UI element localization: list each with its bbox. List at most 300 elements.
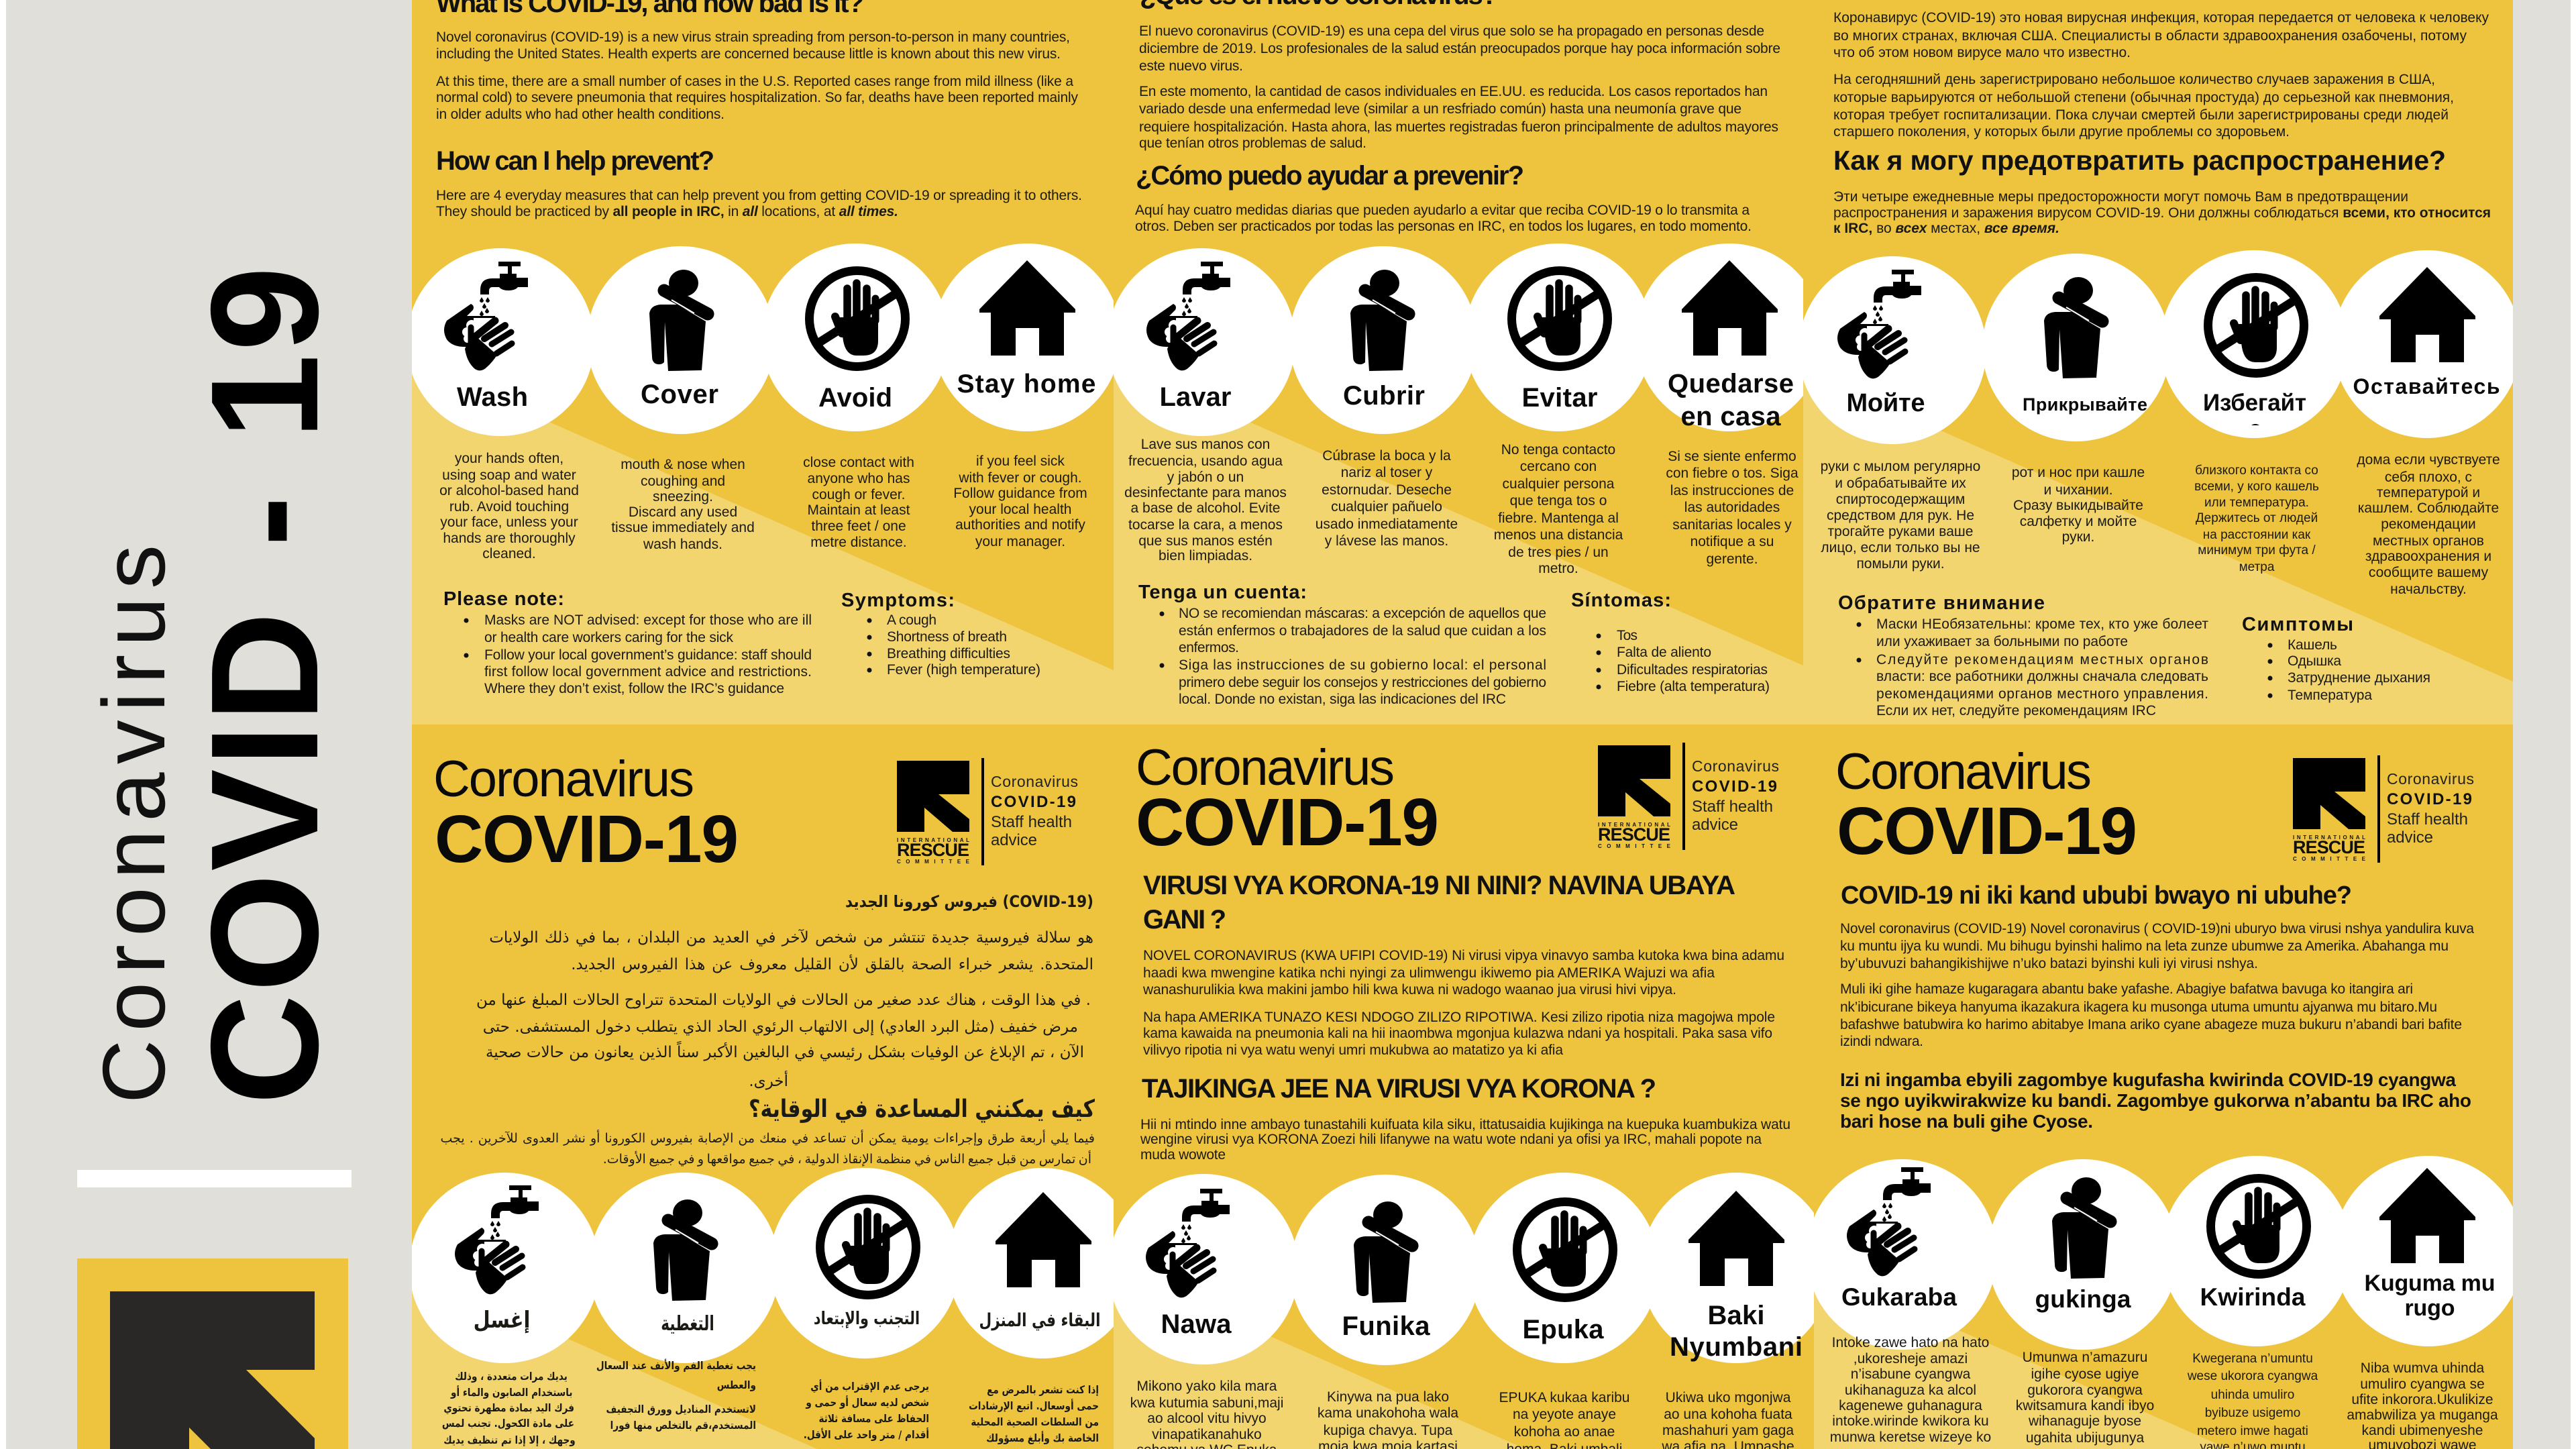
sidebar title: COVID - 19: 19 [180,266,350,439]
text: avoid description: или температура. [2204,496,2309,510]
text: cover description: и чихании. [2043,482,2113,498]
text: wash description: hands are thoroughly [443,531,576,546]
text: evitar description: de tres pies / un [1508,545,1609,560]
text: stay home description: здравоохранения и [2365,549,2491,564]
text block: arabic measures: فيما يلي أربعة طرق وإجراءات يومية يمكن أن تساعد في منعك من الإصابة بفيروس الكورونا أو نشر العدوى للآخرين . يجب [440,1130,1095,1146]
step: quedarse en casa: Quedarse [1668,369,1794,398]
text: nawa description: vinapatikanahuko [1152,1427,1262,1442]
text: cover description [2012,465,2145,545]
text block: arabic intro: أخرى. [749,1071,788,1090]
sidebar title: COVID - 19: - [180,496,350,547]
text: kuguma description: amabwiliza ya muganga [2347,1407,2498,1423]
text block: intro: старшего поколения, у которых были другие проблемы со здоровьем. [1833,124,2290,140]
text: avoid description: metre distance. [810,535,907,550]
heading: como puedo: ¿Cómo puedo ayudar a prevenir? [1136,161,1524,191]
text: avoid description: минимум три фута / [2198,543,2316,557]
list: notes: first follow local government advice and restrictions. [484,664,812,680]
list: notes: Следуйте рекомендациям местных органов [1876,652,2208,667]
text: wash description: على مادة الكحول. تجنب لمس [442,1417,574,1430]
text: quedarse description: gerente. [1706,551,1758,567]
list: symptoms: Breathing difficulties [887,646,1010,661]
list: symptoms: Shortness of breath [887,629,1007,645]
text block: measures: Эти четыре ежедневные меры предосторожности могут помочь Вам в предотвращении [1833,189,2408,205]
text block: intro: vilivyo ripotia ni vya watu wenyi umri mukubwa ao matatizo ya ki afia [1143,1042,1563,1058]
step: cubrir [1289,246,1477,434]
text: lavar description: tocarse la cara, a menos [1128,517,1283,533]
step: wash [409,1173,600,1363]
text: lavar description: desinfectante para manos [1124,485,1287,500]
text: gukaraba description: n’isabune cyangwa [1851,1366,1971,1382]
text block: intro: NOVEL CORONAVIRUS (KWA UFIPI COVID-19) Ni virusi vipya vinavyo samba kutoka kwa bina adamu [1143,948,1784,963]
text: stay home description: your manager. [975,534,1065,549]
panel: Arabic [412,724,1114,1449]
text: quedarse description: las instrucciones de [1670,483,1794,498]
text: lavar description: bien limpiadas. [1159,548,1252,564]
text: wash description: и обрабатывайте их [1835,476,1966,491]
text: cover description [611,457,755,552]
text: kuguma description: umuliro cyangwa se [2360,1377,2485,1392]
text block: arabic intro: هو سلالة فيروسية جديدة تنتشر من شخص لآخر في العديد من البلدان ، بما في ذلك الولايات [489,928,1093,947]
text block: intro: wanashurulikia kwa makini jambo hili kwa kuwa ni wadogo waanao jua virusi hivi vipya. [1142,982,1676,998]
text: gukinga description: Umunwa n’amazuru [2023,1350,2147,1365]
text: kwirinda description: wese ukorora cyangwa [2187,1369,2318,1383]
panel: Russian [1803,0,2513,724]
text: cubrir description: usado inmediatamente [1316,517,1458,532]
text block: intro: На сегодняшний день зарегистрировано небольшое количество случаев заражения в США, [1833,72,2435,87]
text block: arabic measures: أن تمارس من قبل جميع الناس في منظمة الإنقاذ الدولية ، في جميع مواقعها و في جميع الأوقات. [603,1150,1091,1167]
text: funika description [1318,1389,1458,1449]
text: wash description [1821,459,1980,572]
step: nawa: Nawa [1161,1309,1232,1339]
text: stay home description: حمى أوسعال. اتبع الإرشادات [969,1399,1099,1412]
text: stay home description: кашлем. Соблюдайте [2358,500,2499,516]
list: notes: Where they don’t exist, follow the IRC’s guidance [484,681,784,696]
step: funika: Funika [1342,1311,1430,1341]
heading: prevention: TAJIKINGA JEE NA VIRUSI VYA KORONA ? [1142,1074,1656,1104]
step: evitar: Evitar [1521,383,1598,413]
text: quedarse description: Si se siente enfermo [1668,449,1796,464]
text: baki description: Ukiwa uko mgonjwa [1666,1390,1791,1405]
text: cover description: يجب تغطية الفم والأنف عند السعال [596,1359,756,1372]
text: stay home description: الخاصة بك وأبلغ مسؤولك [986,1431,1099,1444]
step: avoid: التجنب والإبتعاد [814,1308,920,1329]
step: cover [1982,254,2170,441]
step: stay home [2333,250,2521,438]
text block: arabic intro: الآن ، تم الإبلاغ عن الوفيات بشكل رئيسي في البالغين الأكبر سناً الذين يعانون من حالات صحية [486,1041,1084,1061]
list: symptoms: Кашель [2288,637,2337,653]
IRC logo and label [897,758,1078,865]
step: stay home: Оставайтесь [2353,374,2500,398]
panel: Kinyarwanda [1814,724,2513,1449]
text block: measures: wengine virusi vya KORONA Zoezi hili lifanywe na watu wote ndani ya ofisi ya IRC, mahali popote na [1140,1132,1762,1147]
step: avoid [761,244,949,431]
step: stay home [933,244,1121,431]
text: quedarse description: con fiebre o tos. Siga [1666,466,1799,481]
IRC logo and label [2293,755,2474,863]
step: quedarse en casa: en casa [1681,402,1781,431]
text: cover description: Сразу выкидывайте [2013,498,2143,513]
text block: measures (bold) [1840,1069,2471,1132]
text block: intro: Novel coronavirus (COVID-19) Novel coronavirus ( COVID-19)ni uburyo bwa virusi nshya yandulira kuva [1840,921,2474,936]
text: avoid description: близкого контакта со [2195,464,2318,478]
text: stay home description: себя плохо, с [2385,470,2472,485]
text block: intro: normal cold) to severe pneumonia that requires hospitalization. So far, deaths have been reported mainly [436,90,1079,105]
list: sintomas: Falta de aliento [1617,645,1711,660]
text block: arabic intro: المتحدة. يشعر خبراء الصحة بالقلق لأن القليل معروف عن هذا الفيروس الجديد. [571,955,1093,973]
text block: intro: во многих странах, включая США. Специалисты в области здравоохранения озабочены, потому [1833,28,2467,44]
list: symptoms [2267,637,2430,703]
text: cover description: coughing and [641,474,725,489]
heading: tenga en cuenta: Tenga un cuenta: [1138,582,1307,603]
step: stay home [947,1168,1138,1358]
text: wash description: or alcohol-based hand [439,483,579,498]
text: stay home description: местных органов [2373,533,2484,549]
text: stay home description: من السلطات الصحية المحلية [971,1416,1099,1428]
text: stay home description: температурой и [2377,485,2480,500]
text: gukinga description: gukorora cyangwa [2027,1383,2143,1398]
step: evitar [1464,244,1652,431]
list: notes: or health care workers caring for the sick [484,630,734,645]
text: stay home description: начальству. [2390,582,2467,597]
text: kwirinda description: byibuze usigemo [2205,1406,2300,1420]
text: avoid description: cough or fever. [812,487,905,502]
text: stay home description: with fever or cough. [958,470,1082,486]
text block: measures: They should be practiced by all people in IRC, in all locations, at all times. [436,204,898,219]
list: notes: enfermos. [1179,640,1239,655]
text: evitar description: No tenga contacto [1501,442,1615,458]
text: wash description: трогайте руками ваше [1828,524,1973,539]
step: avoid: Avoid [818,383,892,413]
text: avoid description: anyone who has [808,471,910,486]
text block: arabic intro: مرض خفيف (مثل البرد العادي) إلى الالتهاب الرئوي الحاد الذي يتطلب دخول المستشفى. حتى [483,1018,1078,1036]
title [1835,743,2137,869]
text: wash description: your hands often, [455,451,564,466]
text: avoid description: Держитесь от людей [2196,511,2318,525]
text: kwirinda description: metero imwe hagati [2197,1424,2308,1438]
text: kuguma description [2347,1360,2498,1449]
text: cubrir description: y lávese las manos. [1325,533,1448,549]
text: avoid description [2194,464,2319,574]
text: evitar description: cualquier persona [1503,476,1615,492]
title: COVID-19 [435,802,739,877]
list: notes: NO se recomiendan máscaras: a excepción de aquellos que [1179,606,1546,621]
text block: intro: которые варьируются от небольшой степени (обычная простуда) до серьезной как пневмония, [1833,90,2454,105]
text: gukaraba description: intoke.wirinde kwikora ku [1832,1413,1989,1429]
list: notes: Siga las instrucciones de su gobierno local: el personal [1179,657,1546,673]
text block: intro [1139,23,1780,151]
list: notes: рекомендациями органов местного управления. [1876,686,2208,702]
step: kuguma mu rugo: Kuguma mu [2364,1271,2496,1296]
IRC logo and label [1598,743,1779,850]
text: kuguma description: ufite inkorora.Ukulikize [2351,1392,2493,1407]
text: wash description [442,1371,576,1446]
text: avoid description: close contact with [803,455,914,470]
text: stay home description: if you feel sick [976,453,1065,469]
text: gukaraba description: ,ukoresheje amazi [1854,1351,1968,1366]
list: symptoms: Температура [2288,688,2372,703]
step: lavar: Lavar [1159,382,1232,412]
step: avoid [769,1168,960,1358]
text block: intro: variado desde una enfermedad leve (similar a un resfriado común) hasta una neumonía grave que [1139,101,1741,117]
text: avoid description: на расстоянии как [2203,528,2311,542]
list: symptoms [867,612,1040,678]
IRC logo block [77,1258,348,1449]
text: avoid description: الحفاظ على مسافة ثلاثة [819,1413,929,1425]
step: wash [407,248,594,436]
heading: symptoms: Симптомы [2242,614,2353,635]
text: kwirinda description [2187,1352,2318,1449]
text: gukaraba description: kagenewe guhanagura [1839,1398,1982,1413]
step: gukaraba [1807,1159,1997,1350]
text: cover description: لاتستخدم المناديل وورق التجفيف [606,1403,756,1415]
text: lavar description: que sus manos estén [1138,533,1273,549]
title: Coronavirus [433,751,694,808]
step: gukinga [1988,1159,2178,1350]
text: wash description: فرك اليد بمادة مطهرة تحتوي [443,1402,574,1415]
text: baki description: mashahuri yam gaga [1662,1423,1794,1438]
text: stay home description: сообщите вашему [2369,565,2489,580]
text block: measures: распространения и заражения вирусом COVID-19. Они должны соблюдаться всеми, кто относится [1833,205,2491,221]
text: wash description: using soap and water [442,468,576,483]
text block: arabic intro [476,928,1093,1090]
list: notes: Follow your local government’s guidance: staff should [484,647,812,663]
text: wash description: يديك مرات متعددة ، وذلك [455,1371,568,1383]
text block: intro: este nuevo virus. [1139,58,1243,74]
white divider bar [77,1170,352,1187]
text: cover description: руки. [2062,529,2094,545]
text: funika description: kama unakohoha wala [1318,1405,1458,1421]
text block: measures [1833,189,2491,236]
text: quedarse description [1666,449,1799,567]
step: cover: Cover [641,380,718,409]
text block: intro [1142,948,1784,1058]
text block: intro: in older adults who had other health conditions. [436,107,724,122]
panel: English [412,0,1114,724]
text block: intro: bafashwe batubwira ko harimo abitabye Imana ariko cyane abageze muza bukuru n’abandi bari bafite [1840,1017,2462,1032]
sidebar title: COVID - 19: COVID [180,612,350,1105]
text block: measures: Hii ni mtindo inne ambayo tunastahili kuifuata kila siku, ittatusaidia kujikinga na kuepuka kuambukiza watu [1140,1117,1790,1132]
text: stay home description: authorities and notify [955,517,1085,533]
text: avoid description [804,1379,929,1441]
sidebar title: Coronavirus: Coronavirus [85,545,183,1104]
step: stay home: Stay home [957,370,1096,398]
list: notes: власти: все работники должны сначала следовать [1876,669,2208,684]
step: cover: التغطية [661,1313,714,1336]
text block: arabic intro: . في هذا الوقت ، هناك عدد صغير من الحالات في الولايات المتحدة تتراوح الحالات المبلغ عنها من [476,991,1091,1009]
text: nawa description: ao alcool vitu hivyo [1147,1411,1267,1426]
step: funika [1290,1175,1481,1365]
text block: intro: En este momento, la cantidad de casos individuales en EE.UU. es reducida. Los casos reportados han [1139,84,1768,99]
text block: intro: At this time, there are a small number of cases in the U.S. Reported cases range from mild illness (like a [436,74,1073,89]
text: stay home description [969,1384,1099,1444]
text: wash description: руки с мылом регулярно [1821,459,1980,474]
text: gukinga description: kwitsamura kandi ibyo [2016,1398,2154,1413]
text: wash description: спиртосодержащим [1836,492,1965,507]
step: cubrir: Cubrir [1343,381,1425,411]
text: avoid description: شخص لديه سعال أو حمى و [805,1395,929,1409]
text block: intro [1840,921,2474,1049]
step: wash: Wash [457,382,528,412]
text block: measures [1135,203,1752,234]
step: quedarse en casa [1635,244,1823,431]
text: wash description: cleaned. [482,546,536,561]
text: kwirinda description: uhinda umuliro [2211,1388,2294,1402]
text: cover description: mouth & nose when [621,457,745,472]
text: wash description: باستخدام الصابون والماء أو [450,1385,572,1399]
heading: how can I help: How can I help prevent? [436,146,714,176]
text: stay home description: your local health [969,502,1071,517]
heading: symptoms: Symptoms: [841,590,955,611]
step: baki nyumbani: Nyumbani [1670,1332,1803,1362]
text: baki description: ao una kohoha fuata [1664,1407,1792,1422]
text block: measures: к IRC, во всех местах, все время. [1833,221,2059,236]
text: evitar description: cercano con [1520,459,1597,474]
text: cover description [596,1359,756,1432]
step: epuka: Epuka [1523,1315,1604,1344]
text block: intro: requiere hospitalización. Hasta ahora, las muertes registradas fueron principalmente de adultos mayores [1139,119,1778,135]
text: lavar description: Lave sus manos con [1141,437,1270,452]
text: gukaraba description: ukihanaguza ka alcol [1845,1383,1976,1398]
text: cover description: Discard any used [629,504,737,520]
text: kuguma description: kandi ubimenyeshe [2362,1423,2483,1438]
text: kwirinda description: Kwegerana n’umuntu [2192,1352,2313,1366]
text: cubrir description: Cúbrase la boca y la [1322,448,1451,464]
text: gukinga description: wihanaguje byose [2028,1413,2141,1429]
list: notes [1857,616,2208,718]
text: evitar description [1494,442,1623,576]
text block: intro: que tenían otros problemas de salud. [1139,136,1366,151]
step: kwirinda: Kwirinda [2200,1283,2306,1311]
title [1136,739,1439,860]
text: avoid description: أقدام / متر واحد على الأقل. [804,1428,929,1441]
list: symptoms: Одышка [2288,653,2341,669]
text: epuka description: EPUKA kukaa karibu [1499,1390,1629,1405]
list: sintomas: Tos [1617,628,1638,643]
text block: intro [1833,10,2489,140]
text: avoid description: метра [2239,560,2275,574]
title [433,751,739,877]
heading: please note: Обратите внимание [1838,592,2045,614]
text: lavar description [1124,437,1287,564]
text block: measures (bold): se ngo uyikwirakwize ku bandi. Zagombye gukorwa n’abantu ba IRC aho [1840,1090,2471,1111]
title: COVID-19 [1837,794,2137,869]
title: Coronavirus [1136,739,1395,796]
text block: measures: Here are 4 everyday measures that can help prevent you from getting COVID-19 or spreading it to others. [436,188,1082,203]
text: epuka description [1499,1390,1629,1449]
text: cubrir description: estornudar. Deseche [1322,482,1452,498]
text block: intro: haadi kwa mwengine katika nchi nyingi za ulimwengu ikiwemo pia AMERIKA Wajuzi wa afia [1143,965,1715,981]
text block: measures: muda wowote [1140,1147,1226,1163]
step: stay home: البقاء في المنزل [979,1309,1100,1331]
text: gukinga description [2016,1350,2154,1446]
text block: intro: kama kawaida na pneumonia kali na hii inaombwa mgonjua kulazwa ndani ya hospitali. Paka sasa vifo [1143,1026,1772,1041]
text block: intro: diciembre de 2019. Los profesionales de la salud están preocupados porque hay poca información sobre [1139,41,1780,56]
text block: measures (bold): Izi ni ingamba ebyili zagombye kugufasha kwirinda COVID-19 cyangwa [1840,1069,2456,1090]
sidebar title: COVID - 19 [180,266,350,1105]
text: cubrir description: cualquier pañuelo [1331,499,1442,515]
text: stay home description: Follow guidance from [953,486,1087,501]
step: kuguma mu rugo [2333,1156,2524,1346]
heading: what is: COVID-19 ni iki kand ububi bwayo ni ubuhe? [1841,881,2352,910]
step: baki nyumbani [1641,1173,1831,1363]
list: symptoms: Затруднение дыхания [2288,670,2430,686]
step: gukinga: gukinga [2035,1285,2131,1313]
list: notes: или ухаживает за больными по работе [1876,634,2128,649]
text: funika description: kupiga chavya. Tupa [1324,1423,1453,1438]
text block: intro: Novel coronavirus (COVID-19) is a new virus strain spreading from person-to-person in many countries, [436,30,1070,45]
step: cover [589,1173,780,1363]
list: notes: Маски НЕобязательны: кроме тех, кто уже болеет [1876,616,2208,632]
title: COVID-19 [1136,785,1439,860]
list: sintomas [1597,628,1770,694]
text: nawa description: Mikono yako kila mara [1137,1379,1277,1394]
text: avoid description: three feet / one [811,519,906,534]
text: gukaraba description: Intoke zawe hato na hato [1832,1335,1989,1350]
text: cubrir description: nariz al toser y [1341,465,1433,480]
list: notes: primero debe seguir los consejos y restricciones del gobierno [1179,675,1546,690]
heading: how to prevent: Как я могу предотвратить распространение? [1833,145,2446,176]
text: wash description: rub. Avoid touching [449,499,569,515]
text: avoid description: всеми, у кого кашель [2194,480,2319,494]
text: quedarse description: sanitarias locales y [1672,517,1792,533]
text: avoid description: Maintain at least [808,502,910,518]
text: cover description: والعطس [717,1379,756,1391]
text: evitar description: que tenga tos o [1510,493,1607,508]
text block: arabic measures [440,1130,1095,1167]
step: kuguma mu rugo: rugo [2404,1295,2455,1321]
step: wash: Мойте [1846,389,1925,417]
step: avoid [2160,250,2348,438]
text block: intro: by’ubuvuzi bahangikishijwe n’uko batazi byinshi kuli iyi virusi nshya. [1840,956,2258,971]
text: gukaraba description: munwa keretse wizeye ko [1830,1430,1991,1445]
text: wash description: помыли руки. [1856,556,1945,572]
heading: please note: Please note: [443,588,564,610]
text block: intro: Коронавирус (COVID-19) это новая вирусная инфекция, которая передается от человека к человеку [1833,10,2489,25]
text: cover description: рот и нос при кашле [2012,465,2145,480]
text: stay home description: дома если чувствуете [2357,452,2500,468]
text: epuka description: kohoha ao anae [1514,1424,1615,1440]
text: wash description: your face, unless your [440,515,578,530]
text: evitar description: menos una distancia [1494,527,1623,543]
text: epuka description: na yeyote anaye [1513,1407,1616,1422]
heading: what is: VIRUSI VYA KORONA-19 NI NINI? NAVINA UBAYA [1143,871,1735,900]
text: cover description: wash hands. [643,537,722,552]
text block: intro: Muli iki gihe hamaze kugaragara abantu bake yafashe. Abagiye bafatwa bavuga ko itangira ari [1840,981,2413,997]
text: evitar description: fiebre. Mantenga al [1498,511,1619,526]
text block: intro: что об этом новом вирусе мало что известно. [1833,45,2131,60]
text: gukinga description: igihe cyose ugiye [2031,1366,2139,1382]
text block: intro [436,30,1079,122]
text: cubrir description [1316,448,1458,549]
text: kuguma description: Niba wumva uhinda [2361,1360,2485,1376]
list: sintomas: Fiebre (alta temperatura) [1617,679,1770,694]
panel: Swahili [1114,724,1814,1449]
step: nawa [1108,1174,1299,1364]
text: stay home description [2357,452,2500,597]
text block: intro: including the United States. Health experts are concerned because little is known about this new virus. [436,46,1061,62]
text: stay home description [953,453,1087,549]
text: lavar description: a base de alcohol. Evite [1131,500,1280,516]
text block: measures [436,188,1082,219]
step: baki nyumbani: Baki [1708,1301,1764,1330]
list: notes: Если их нет, следуйте рекомендациям IRC [1876,703,2156,718]
text: wash description: лицо, если только вы не [1821,540,1980,555]
text block: intro: El nuevo coronavirus (COVID-19) es una cepa del virus que solo se ha propagado en personas desde [1139,23,1764,39]
list: sintomas: Dificultades respiratorias [1617,662,1768,678]
text: cover description: sneezing. [653,489,713,504]
text: stay home description: рекомендации [2381,517,2476,532]
text block: measures: otros. Deben ser practicados por todas las personas en IRC, en todos los lugares, en todo momento. [1135,219,1752,234]
